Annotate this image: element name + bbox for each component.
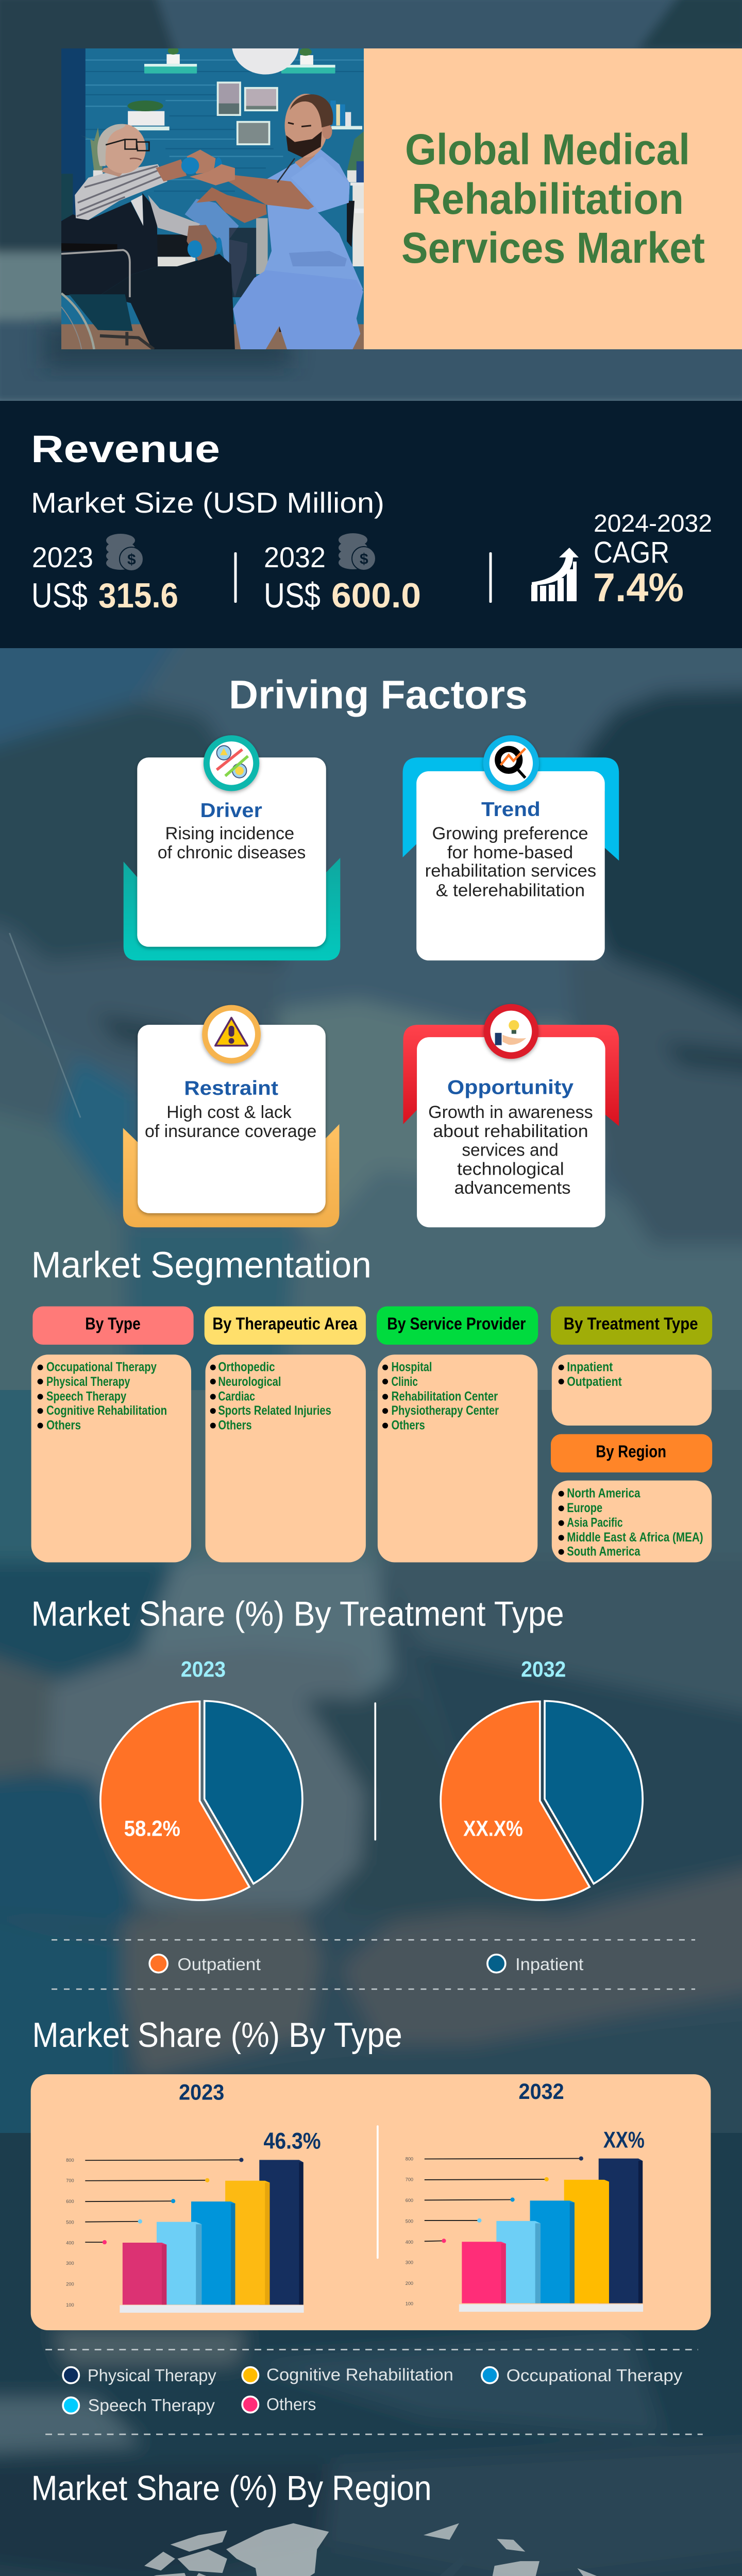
text: driver: Rising incidence (165, 824, 294, 843)
pie chart: 2032 (441, 1657, 643, 1900)
stat: CAGR: CAGR (594, 536, 669, 569)
segment: by therapeutic area: Others (218, 1418, 252, 1432)
legend: by type: Speech Therapy (88, 2396, 215, 2415)
segment: by treatment type (551, 1307, 712, 1426)
segment: by service provider: Hospital (391, 1360, 432, 1374)
title: Global Medical (405, 125, 690, 174)
wheelchair (61, 243, 154, 349)
bar chart: 2023: 46.3% (264, 2128, 321, 2154)
bar chart: 2032 (406, 2127, 645, 2312)
text: restraint (145, 1077, 316, 1141)
segment: by type: Occupational Therapy (46, 1360, 157, 1374)
text: driver: Driver (200, 800, 262, 822)
segment: by service provider: Rehabilitation Center (391, 1389, 498, 1403)
text: opportunity: Opportunity (447, 1076, 574, 1098)
stat: 2032 (264, 541, 421, 615)
stat: 2032: 600.0 (331, 576, 421, 615)
panel: by type charts (31, 2074, 711, 2330)
header photo: therapist helping patient (61, 48, 364, 349)
card: trend (403, 735, 619, 960)
bar chart: 2023: 400 (66, 2241, 74, 2246)
legend: treatment type (149, 1955, 583, 1974)
panel: revenue (0, 401, 742, 648)
bar chart: 2023: 700 (66, 2178, 74, 2183)
bar chart: 2023 (66, 2128, 321, 2313)
segment: by service provider (377, 1307, 538, 1562)
panel: by type charts: 2032 (519, 2079, 564, 2104)
bar chart: 2032: 200 (406, 2281, 413, 2286)
world map (71, 2523, 667, 2576)
icon: coins 2032 (339, 533, 376, 570)
pie chart: 2023: 2023 (181, 1657, 226, 1682)
segment: by type: By Type (85, 1315, 141, 1334)
icon: driver (204, 735, 259, 791)
segment: by type: Physical Therapy (46, 1375, 130, 1389)
stat: 2023 (31, 541, 178, 615)
segment: by region: By Region (596, 1443, 666, 1462)
segment: by region: Asia Pacific (567, 1516, 623, 1530)
heading: revenue: Revenue (31, 428, 220, 470)
segment: by region: South America (567, 1545, 640, 1559)
text: restraint: High cost & lack (166, 1103, 292, 1122)
stat: 2023: 315.6 (98, 576, 178, 615)
segment: by type (31, 1307, 194, 1562)
heading: treatment type: Market Share (%) By Treatment Type (31, 1595, 564, 1634)
segment: by service provider: Clinic (391, 1375, 418, 1389)
bar chart: 2023: 600 (66, 2199, 74, 2204)
pie chart: 2032: 2032 (521, 1657, 566, 1682)
segment: by region: Middle East & Africa (MEA) (567, 1531, 703, 1545)
icon: trend (483, 735, 539, 791)
title (401, 125, 705, 272)
stat: 2032: US$ (264, 576, 321, 615)
background photo: patient and clinicians (0, 602, 742, 2576)
bar chart: 2032: 800 (406, 2156, 413, 2161)
text: opportunity: Growth in awareness (428, 1103, 593, 1122)
bar chart: 2023: 200 (66, 2282, 74, 2287)
legend: treatment type: Inpatient (515, 1955, 583, 1974)
segment: by region: North America (567, 1487, 640, 1501)
market segmentation (31, 1245, 712, 1562)
shelves (81, 48, 364, 213)
legend: by type: Others (266, 2395, 316, 2414)
text: opportunity: advancements (454, 1178, 571, 1198)
stat: 2023: US$ (31, 576, 88, 615)
text: opportunity: about rehabilitation (433, 1122, 588, 1141)
stat: 2032: 2032 (264, 541, 326, 573)
patient (61, 124, 235, 349)
market share by type (30, 2074, 711, 2576)
text: trend (425, 799, 596, 900)
pie chart: 2032: XX.X% (463, 1816, 523, 1840)
icon: coins 2023 (106, 534, 143, 571)
icon: restraint (202, 1005, 261, 1063)
legend: by type: Occupational Therapy (507, 2366, 683, 2385)
bar chart: 2032: 100 (406, 2301, 413, 2306)
pie chart: 2023: 58.2% (124, 1816, 180, 1840)
bar chart: 2023: 500 (66, 2219, 74, 2225)
legend: by type (63, 2365, 683, 2415)
title: Services Market (401, 224, 705, 272)
icon: growth arrow (531, 548, 579, 601)
text: driver (158, 800, 306, 862)
bar chart: 2032: 500 (406, 2218, 413, 2224)
segment: by treatment type: Inpatient (567, 1360, 613, 1374)
text: trend: Growing preference (432, 824, 588, 843)
driving factors cards (123, 735, 619, 1227)
header background (0, 0, 742, 407)
pie chart: 2023 (100, 1657, 302, 1900)
bar chart: 2032: 600 (406, 2198, 413, 2203)
legend: by type: Physical Therapy (88, 2366, 216, 2385)
segment: by therapeutic area: By Therapeutic Area (212, 1315, 358, 1334)
segment: by therapeutic area: Cardiac (218, 1389, 255, 1403)
card: driver (124, 735, 340, 960)
text: opportunity (428, 1076, 593, 1198)
segment: by service provider: Physiotherapy Center (391, 1404, 499, 1418)
text: restraint: of insurance coverage (145, 1122, 316, 1141)
bar chart: 2023: 800 (66, 2158, 74, 2163)
segment: by type: Speech Therapy (46, 1389, 126, 1403)
bar chart: 2032: XX% (603, 2127, 645, 2153)
heading: by type: Market Share (%) By Type (32, 2015, 402, 2055)
icon: opportunity (484, 1004, 538, 1059)
text: driver: of chronic diseases (158, 843, 306, 862)
segment: by region (551, 1434, 712, 1562)
title: Rehabilitation (412, 175, 684, 223)
bar chart: 2032: 400 (406, 2240, 413, 2245)
segment: by treatment type: Outpatient (567, 1375, 622, 1389)
legend: by type: Cognitive Rehabilitation (266, 2365, 453, 2384)
stat: 2023: 2023 (32, 541, 93, 573)
legend: treatment type: Outpatient (177, 1955, 261, 1974)
segment: by therapeutic area: Orthopedic (218, 1360, 275, 1374)
text: trend: rehabilitation services (425, 861, 596, 881)
segment: by therapeutic area: Neurological (218, 1375, 281, 1389)
text: trend: for home-based (447, 843, 573, 862)
bar chart: 2023: 300 (66, 2261, 74, 2266)
text: trend: Trend (481, 799, 541, 821)
segment: by treatment type: By Treatment Type (564, 1315, 698, 1334)
text: restraint: Restraint (184, 1077, 278, 1099)
bar chart: 2032: 700 (406, 2177, 413, 2182)
icon: coins 2023: $ (127, 551, 136, 568)
segment: by type: Cognitive Rehabilitation (46, 1404, 167, 1418)
market share by treatment type (31, 1595, 695, 2055)
segment: by type: Others (46, 1418, 81, 1432)
segment: by service provider: By Service Provider (387, 1315, 526, 1334)
therapist (190, 94, 363, 349)
stat: CAGR (593, 510, 712, 610)
text: market size: Market Size (USD Million) (31, 486, 384, 519)
segment: by therapeutic area (205, 1307, 366, 1562)
text: opportunity: technological (457, 1159, 564, 1179)
stat: CAGR: 7.4% (593, 565, 684, 610)
heading: driving factors: Driving Factors (229, 672, 528, 717)
bar chart: 2023: 100 (66, 2302, 74, 2308)
bar chart: 2032: 300 (406, 2260, 413, 2265)
panel: by type charts: 2023 (179, 2080, 224, 2105)
text: trend: & telerehabilitation (436, 880, 585, 900)
wall frames (217, 81, 278, 145)
text: opportunity: services and (462, 1141, 559, 1160)
heading: by region: Market Share (%) By Region (31, 2469, 432, 2508)
segment: by region: Europe (567, 1501, 602, 1515)
stat: CAGR: 2024-2032 (594, 510, 712, 537)
heading: market segmentation: Market Segmentation (31, 1245, 372, 1286)
card: restraint (123, 1005, 339, 1227)
title panel (364, 48, 742, 349)
icon: coins 2032: $ (360, 551, 368, 568)
segment: by service provider: Others (391, 1418, 425, 1432)
card: opportunity (403, 1004, 619, 1227)
background colleague (185, 199, 247, 297)
segment: by therapeutic area: Sports Related Injuries (218, 1404, 331, 1418)
